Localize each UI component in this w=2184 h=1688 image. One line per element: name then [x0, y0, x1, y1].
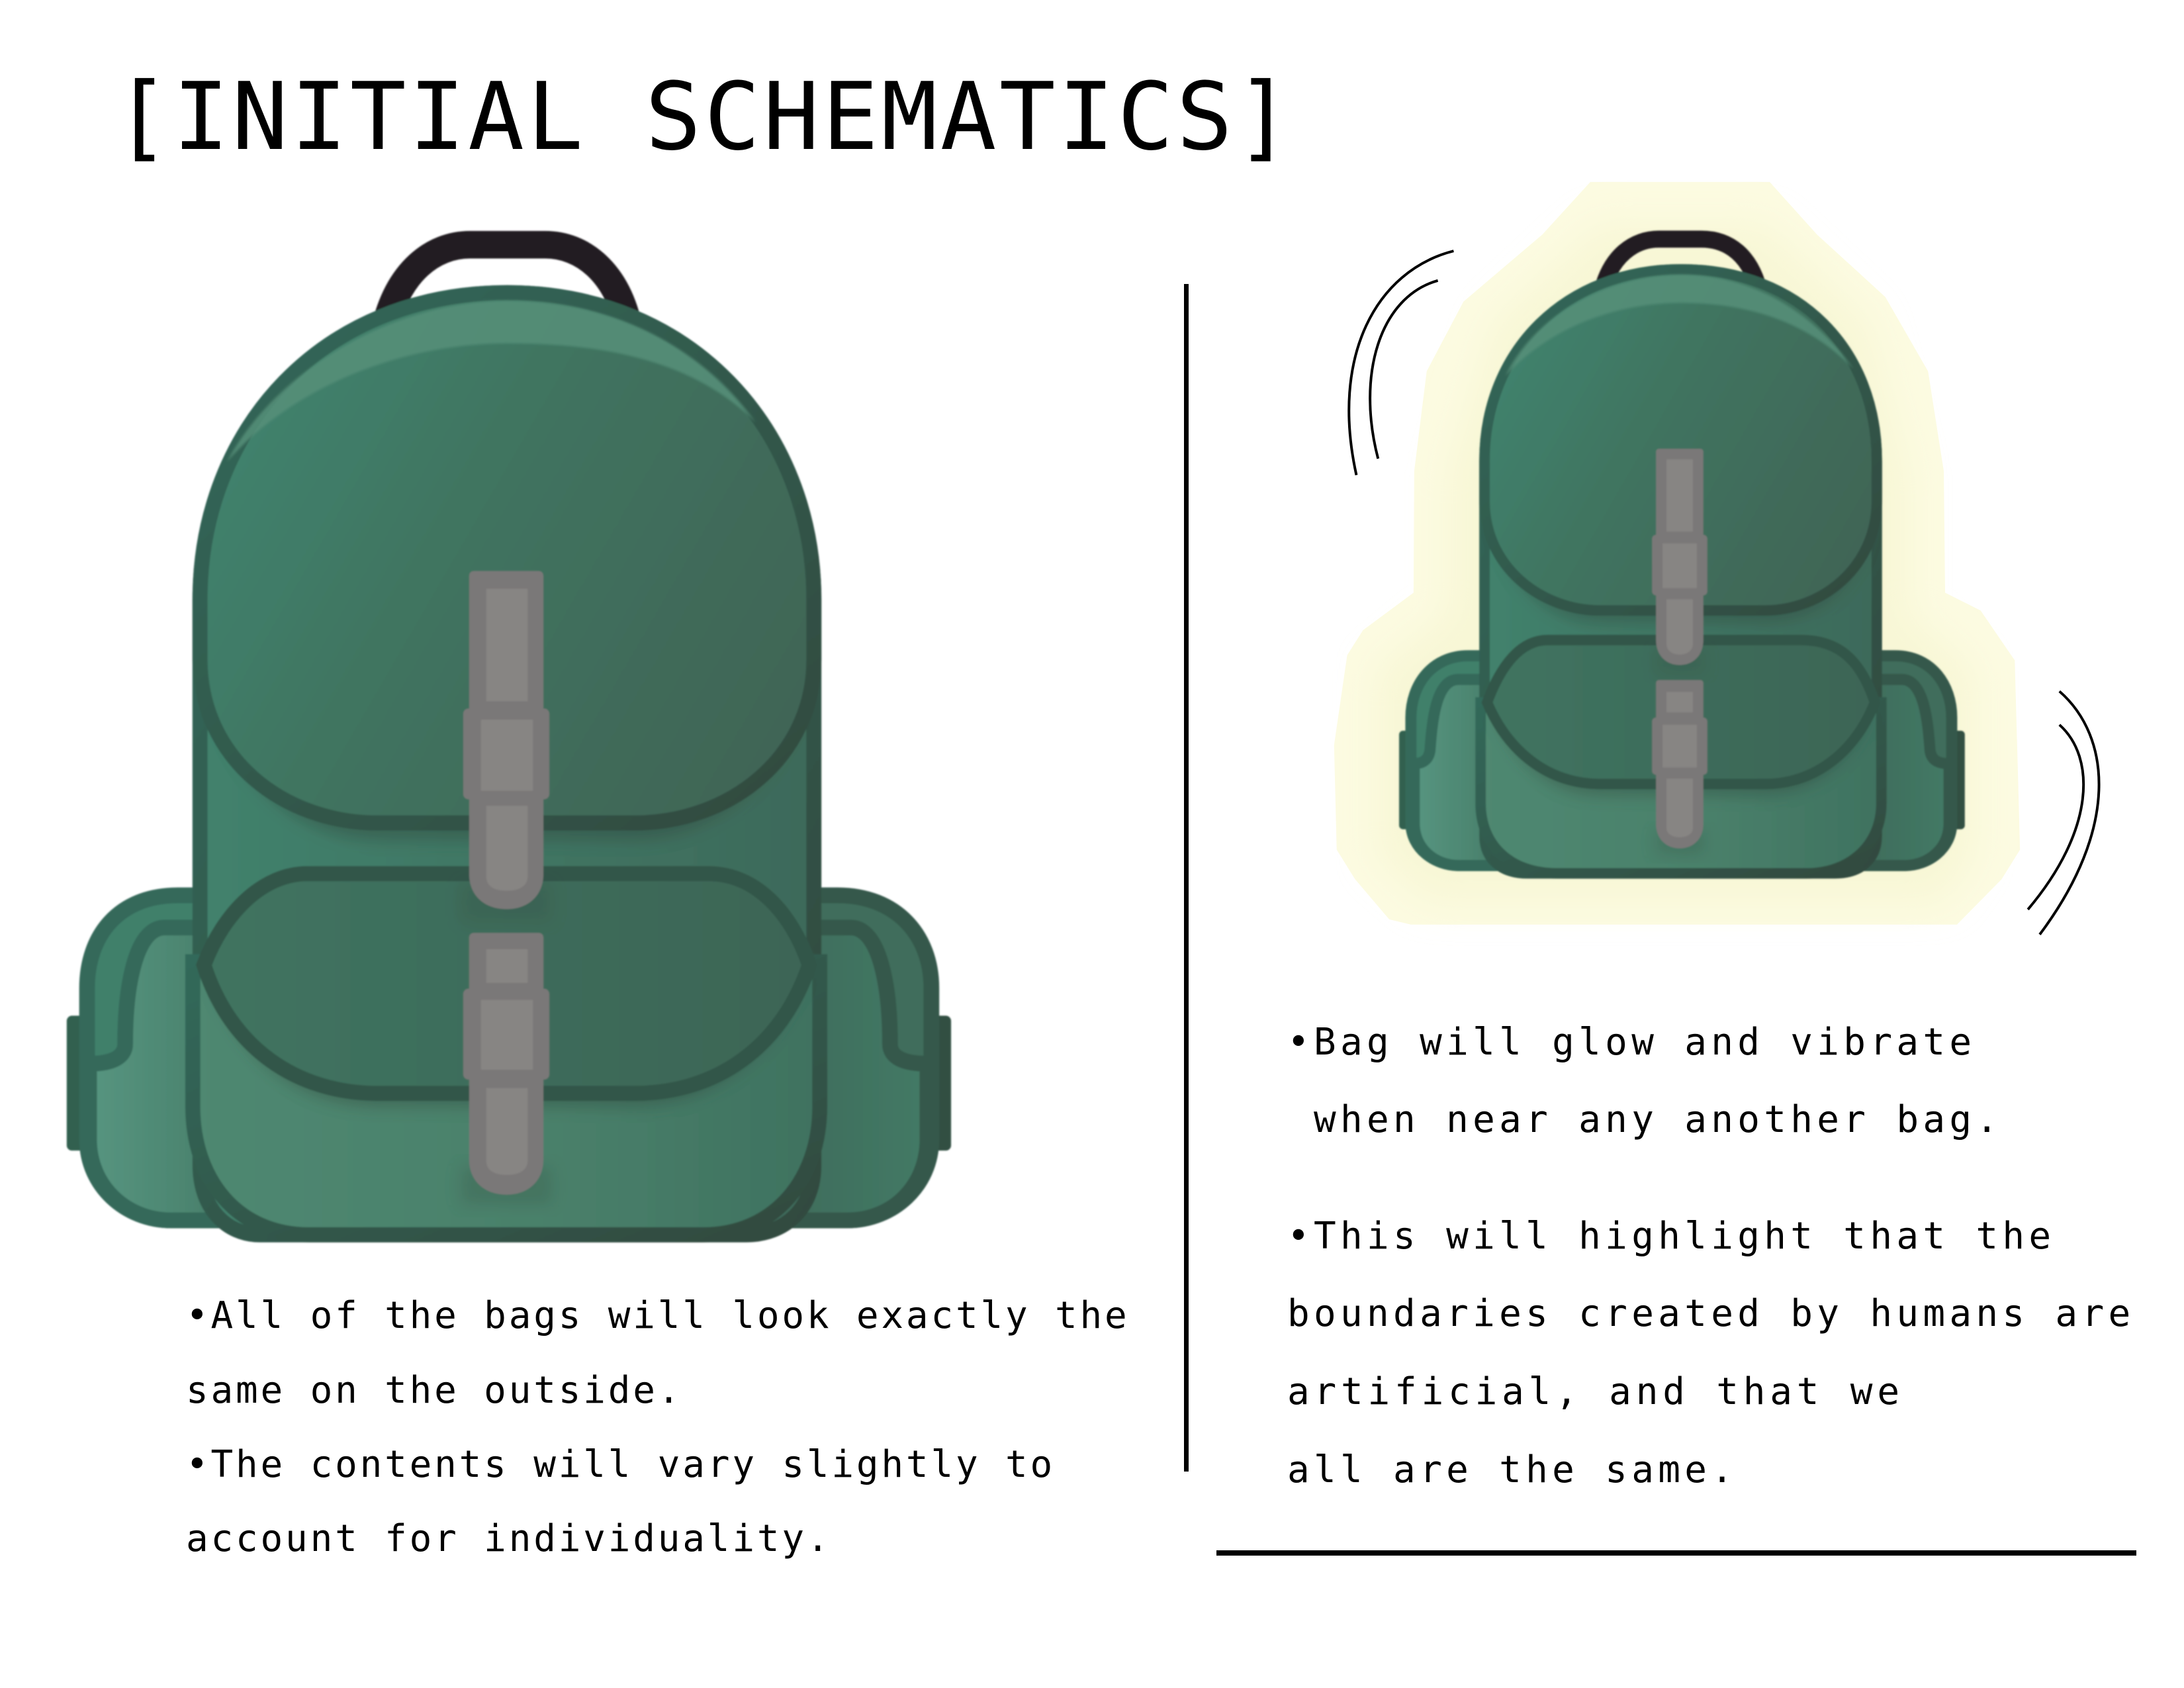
top highlight — [1506, 275, 1854, 376]
text block: boundaries bullet: artificial, and that we — [1287, 1370, 1904, 1413]
bottom pocket — [1480, 702, 1882, 873]
text block: left bullets — [186, 1294, 1130, 1560]
upper strap and buckle — [1652, 449, 1707, 675]
lower flap — [204, 874, 809, 1094]
lower strap and buckle — [460, 933, 552, 1205]
text block: glow and vibrate bullet: when near any another bag. — [1287, 1098, 2002, 1141]
handle — [1601, 239, 1760, 297]
divider: vertical — [1184, 284, 1189, 1472]
backpack: small right with glow — [1399, 239, 1965, 873]
divider: horizontal — [1216, 1550, 2136, 1556]
lower flap — [1487, 640, 1875, 784]
left side pocket — [67, 896, 276, 1220]
glow around small backpack — [1334, 182, 2020, 925]
vibration lines: lower right — [2028, 691, 2099, 935]
handle — [385, 245, 629, 330]
text block: boundaries bullet: •This will highlight that the — [1287, 1215, 2055, 1258]
text block: boundaries bullet — [1287, 1215, 2134, 1491]
upper flap — [1484, 269, 1877, 610]
lower strap and buckle — [1652, 680, 1707, 856]
text block: left bullets: •All of the bags will look exactly the — [186, 1294, 1130, 1337]
left side pocket — [1399, 656, 1527, 865]
text block: left bullets: same on the outside. — [186, 1369, 682, 1412]
flap shadows — [210, 673, 805, 1107]
text block: glow and vibrate bullet: •Bag will glow and vibrate — [1287, 1021, 1976, 1064]
main body — [1484, 269, 1877, 873]
top highlight — [227, 301, 755, 462]
right side pocket — [1836, 656, 1965, 865]
title: [INITIAL SCHEMATICS] — [114, 63, 1295, 171]
main body — [200, 293, 814, 1235]
text block: left bullets: •The contents will vary slightly to — [186, 1443, 1055, 1486]
text block: boundaries bullet: boundaries created by humans are — [1287, 1292, 2134, 1335]
right side pocket — [736, 896, 951, 1220]
text block: boundaries bullet: all are the same. — [1287, 1448, 1737, 1491]
vibration lines: upper left — [1349, 251, 1453, 475]
upper flap — [200, 293, 814, 823]
backpack: large left — [67, 245, 951, 1235]
bottom pocket — [193, 962, 820, 1235]
flap shadows — [1494, 514, 1869, 795]
text block: glow and vibrate bullet — [1287, 1021, 2002, 1141]
text block: left bullets: account for individuality. — [186, 1517, 831, 1560]
upper strap and buckle — [460, 571, 552, 922]
